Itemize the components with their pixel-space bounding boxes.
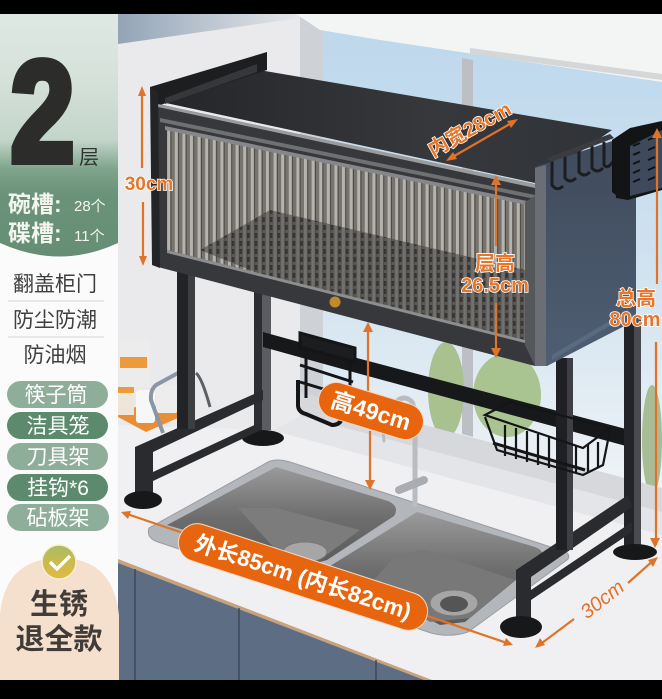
dimension: total height 80cm: 80cm bbox=[609, 309, 661, 331]
accessory tag: hooks: 挂钩*6 bbox=[27, 477, 89, 500]
drains bbox=[283, 542, 327, 562]
panel: left sidebar bbox=[0, 14, 119, 680]
dimension: shelf height 26.5cm: 层高 bbox=[475, 251, 515, 275]
header panel bbox=[0, 14, 118, 256]
accessory tag: cutting board rack: 砧板架 bbox=[26, 507, 90, 530]
cups and tray bbox=[118, 340, 210, 433]
tier unit: 层 bbox=[79, 147, 99, 169]
left basin bbox=[167, 467, 396, 566]
accessory tag: knife rack bbox=[7, 443, 108, 470]
dimension: total height 80cm: 总高 bbox=[616, 286, 656, 310]
dimension: depth 30cm: 30cm bbox=[577, 576, 629, 624]
utensil holder bbox=[298, 333, 355, 425]
rack: legs and base bbox=[124, 272, 657, 638]
side panel bbox=[535, 133, 636, 366]
cabinet bbox=[150, 52, 636, 366]
top face bbox=[166, 70, 612, 183]
accessory tag: cleaning basket: 洁具笼 bbox=[26, 415, 90, 438]
accessory tag: cutting board rack bbox=[7, 504, 109, 531]
sink bbox=[148, 460, 569, 635]
front frame bbox=[158, 104, 535, 366]
panel: left sidebar: 11个 bbox=[74, 228, 105, 245]
number of tiers: 2 bbox=[11, 33, 74, 192]
dimension: clearance 49cm: 高49cm bbox=[328, 387, 414, 435]
front left leg bbox=[177, 272, 195, 429]
knife holder bbox=[612, 121, 662, 200]
accessory tag: hooks bbox=[7, 474, 108, 501]
accessory tag: cleaning basket bbox=[7, 412, 108, 439]
bowl slots: 碗槽: bbox=[8, 191, 62, 217]
dimension: shelf height 26.5cm bbox=[461, 175, 529, 358]
fluted glass door bbox=[165, 120, 527, 345]
plate slots: 碟槽: bbox=[8, 220, 62, 246]
backsplash and sill bbox=[300, 392, 662, 512]
dimension: inner width 28cm: 内宽28cm bbox=[424, 97, 515, 162]
dimension: outer length 85cm: 外长85cm (内长82cm) bbox=[191, 531, 414, 624]
guarantee badge: 退全款 bbox=[15, 623, 103, 656]
background: kitchen scene bbox=[118, 14, 662, 680]
dimension: total height 80cm bbox=[609, 128, 662, 548]
lower cabinets bbox=[118, 559, 432, 680]
features list bbox=[8, 273, 104, 367]
accessory tag: knife rack: 刀具架 bbox=[26, 446, 90, 469]
icon: check mark bbox=[42, 545, 76, 579]
dimension: 30cm cabinet height bbox=[125, 86, 173, 266]
guarantee badge bbox=[0, 545, 119, 680]
back left bracket bbox=[150, 52, 267, 106]
left base bbox=[135, 390, 263, 497]
accessory tag: chopstick holder bbox=[7, 381, 108, 408]
window bbox=[296, 14, 662, 495]
hooks bbox=[547, 134, 614, 189]
right back leg bbox=[624, 318, 641, 548]
guarantee badge: 生锈 bbox=[30, 588, 88, 621]
top black bar bbox=[0, 0, 662, 14]
dimension: clearance 49cm bbox=[314, 322, 428, 490]
sponge basket bbox=[485, 402, 610, 475]
right basin bbox=[330, 512, 543, 625]
features list: 防尘防潮 bbox=[13, 309, 97, 332]
dimension: outer length 85cm bbox=[121, 511, 513, 646]
faucet bbox=[383, 398, 424, 505]
bottom black bar bbox=[0, 680, 662, 699]
dimension: 30cm cabinet height: 30cm bbox=[125, 174, 173, 195]
features list: 翻盖柜门 bbox=[13, 273, 97, 296]
rail bbox=[263, 332, 626, 446]
right front leg bbox=[556, 358, 573, 550]
back left leg bbox=[254, 290, 271, 430]
right base bbox=[516, 495, 632, 627]
features list: 防油烟 bbox=[24, 344, 86, 367]
accessory tag: chopstick holder: 筷子筒 bbox=[24, 384, 88, 407]
panel: left sidebar: 28个 bbox=[74, 198, 106, 215]
dimension: depth 30cm bbox=[535, 557, 658, 648]
countertop bbox=[118, 425, 662, 680]
dimension: shelf height 26.5cm: 26.5cm bbox=[461, 275, 529, 297]
door handle bbox=[330, 296, 340, 308]
